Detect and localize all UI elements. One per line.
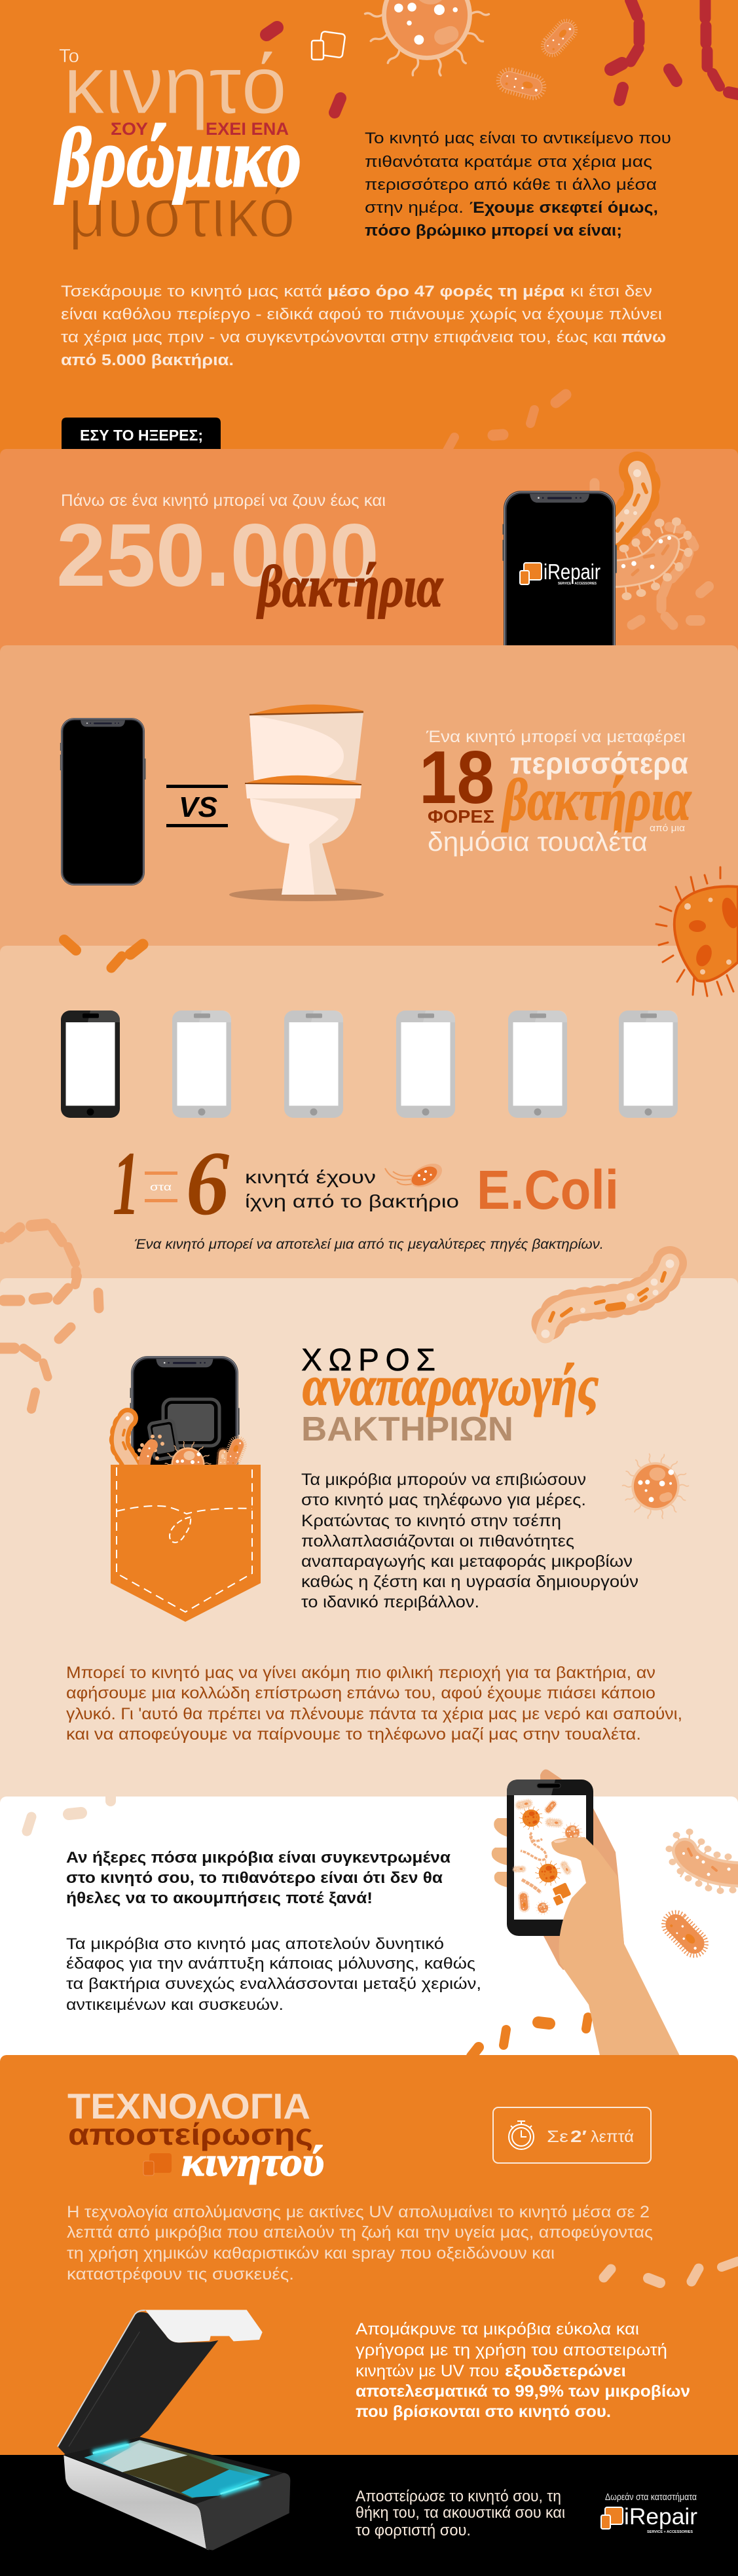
label: did you know: ΕΣΥ ΤΟ ΗΞΕΡΕΣ; <box>80 427 203 444</box>
text block: intro <box>365 130 671 240</box>
text block: removes microbes <box>356 2320 690 2421</box>
title: κινητό <box>64 40 287 131</box>
panel: breeding ground <box>0 1259 738 1808</box>
heading: ΤΕΧΝΟΛΟΓΙΑ <box>67 2086 310 2126</box>
text: 18 times more bacteria: βακτήρια <box>502 768 692 832</box>
stat label: bacteria: βακτήρια <box>257 554 443 619</box>
text block: 47 times a day: είναι καθόλου περίεργο - ειδικά αφού το πιάνουμε χωρίς να έχουμε πλύνει <box>61 306 662 323</box>
decorative capsules <box>0 1276 99 1409</box>
text: 18 times more bacteria: Ένα κινητό μπορεί να μεταφέρει <box>426 728 686 746</box>
text block: intro: Έχουμε σκεφτεί όμως, <box>470 199 658 217</box>
text block: 47 times a day: από 5.000 βακτήρια. <box>61 351 234 369</box>
text block: microbes: Κρατώντας το κινητό στην τσέπη <box>301 1512 561 1530</box>
text block: microbes: καθώς η ζέστη και η υγρασία δημιουργούν <box>301 1573 638 1591</box>
text block: intro: Το κινητό μας είναι το αντικείμενο που <box>365 130 671 147</box>
text: sterilize accessories: το φορτιστή σου. <box>356 2522 471 2539</box>
text: E.Coli: E.Coli <box>477 1159 619 1221</box>
text: sterilize accessories: θήκη του, τα ακουστικά σου και <box>356 2504 565 2522</box>
heading: κινητού <box>181 2140 324 2185</box>
logo: iRepair: iRepair <box>624 2504 697 2530</box>
stat: 250.000: 250.000 <box>56 505 379 605</box>
text: 18 times more bacteria: ΦΟΡΕΣ <box>428 806 494 827</box>
text block: removes microbes: κινητών με UV που <box>356 2362 499 2380</box>
illustration: phone in pocket <box>111 1356 261 1622</box>
note: Ένα κινητό μπορεί να αποτελεί μια από τις μεγαλύτερες πηγές βακτηρίων. <box>134 1237 604 1252</box>
panel: phone vs toilet <box>0 645 738 959</box>
text block: removes microbes: Απομάκρυνε τα μικρόβια εύκολα και <box>356 2320 639 2338</box>
heading <box>301 1343 599 1448</box>
icon: stopwatch <box>509 2121 534 2149</box>
germ: ball bacterium <box>665 1829 738 1894</box>
pocket <box>111 1465 261 1622</box>
text block: sticky coating: Μπορεί το κινητό μας να γίνει ακόμη πιο φιλική περιοχή για τα βακτήρια, αν <box>66 1664 655 1682</box>
panel: 250.000 bacteria <box>0 449 738 715</box>
germs in pocket <box>120 1416 248 1486</box>
illustration: hand holding phone <box>492 1770 681 2058</box>
text: 18 times more bacteria: δημόσια τουαλέτα <box>428 827 648 857</box>
vs badge <box>166 785 228 827</box>
text block: microbes: Τα μικρόβια μπορούν να επιβιώσουν <box>301 1471 586 1489</box>
icon: rod germ <box>658 1907 712 1961</box>
text block: UV technology: Η τεχνολογία απολύμανσης με ακτίνες UV απολυμαίνει το κινητό μέσα σε 2 <box>67 2203 650 2221</box>
phone <box>60 718 145 885</box>
text block: UV technology <box>67 2203 653 2283</box>
text block: 47 times a day: Τσεκάρουμε το κινητό μας κατά <box>61 283 322 300</box>
stat: 1 in 6: 1 <box>113 1133 139 1234</box>
text block: 47 times a day: μέσο όρο 47 φορές τη μέρα <box>327 283 564 300</box>
text block: intro: πιθανότατα κρατάμε στα χέρια μας <box>365 153 652 171</box>
title: μυστικό <box>68 173 295 252</box>
text: sterilize accessories <box>356 2488 565 2539</box>
decorative capsules <box>64 940 143 968</box>
text: phones have traces: ίχνη από το βακτήριο <box>245 1191 459 1211</box>
text: bold callout: Αν ήξερες πόσα μικρόβια είναι συγκεντρωμένα <box>66 1849 451 1867</box>
icon: e.coli germ <box>385 1159 446 1192</box>
text: bold callout: ήθελες να το ακουμπήσεις ποτέ ξανά! <box>66 1889 373 1907</box>
text block: intro: πόσο βρώμικο μπορεί να είναι; <box>365 222 622 240</box>
logo: iRepair <box>520 560 600 586</box>
stat: 1 in 6 <box>113 1133 229 1234</box>
text block: infection: Τα μικρόβια στο κινητό μας αποτελούν δυνητικό <box>66 1935 444 1953</box>
badge: in 2 minutes: λεπτά <box>591 2128 634 2146</box>
decorative capsules <box>604 2261 738 2283</box>
text block: removes microbes: γρήγορα με τη χρήση του αποστειρωτή <box>356 2341 667 2359</box>
title: ΕΧΕΙ ΕΝΑ <box>206 119 289 139</box>
text: free in stores: Δωρεάν στα καταστήματα <box>605 2492 697 2503</box>
text: phones have traces: κινητά έχουν <box>245 1167 376 1187</box>
text block: 47 times a day: κι έτσι δεν <box>570 283 652 300</box>
logo: iRepair <box>601 2504 697 2534</box>
text block: infection: τα βακτήρια συνεχώς εναλλάσσονται μεταξύ χεριών, <box>66 1975 481 1993</box>
title <box>54 40 301 252</box>
panel: UV sterilization <box>0 2055 738 2576</box>
germ: wiggly bacterium <box>541 1259 674 1338</box>
illustration: UV sterilizer <box>58 2310 290 2550</box>
text block: infection: έδαφος για την ανάπτυξη κάποιας μόλυνσης, καθώς <box>66 1955 475 1973</box>
badge: in 2 minutes: 2′ <box>570 2128 587 2146</box>
text block: intro: περισσότερο από κάθε τι άλλο μέσα <box>365 176 657 194</box>
text block: microbes: πολλαπλασιάζονται οι πιθανότητες <box>301 1532 574 1550</box>
icon: round germ <box>623 1454 688 1519</box>
text block: 47 times a day: πάνω <box>621 329 666 346</box>
heading: ΧΩΡΟΣ <box>301 1343 435 1378</box>
text block: UV technology: λεπτά από μικρόβια που απειλούν τη ζωή και την υγεία μας, αποφεύγοντας <box>67 2223 653 2242</box>
text block: infection <box>66 1935 481 2014</box>
text block: microbes: το ιδανικό περιβάλλον. <box>301 1593 479 1611</box>
footer band <box>0 2455 738 2576</box>
icon: large germ <box>365 0 489 76</box>
text: phones have traces <box>245 1167 459 1211</box>
text: intro line: Πάνω σε ένα κινητό μπορεί να ζουν έως και <box>61 492 386 510</box>
label: did you know <box>62 418 221 458</box>
heading <box>67 2086 324 2185</box>
text block: UV technology: καταστρέφουν τις συσκευές. <box>67 2265 294 2283</box>
title: βρώμικο <box>54 111 301 204</box>
panel: hero intro <box>0 0 738 458</box>
bacteria decoration: red chain <box>267 0 738 113</box>
logo: iRepair: SERVICE + ACCESSORIES <box>647 2530 693 2534</box>
text block: sticky coating: και να αποφεύγουμε να παίρνουμε το τηλέφωνο μαζί μας στην τουαλέτα. <box>66 1725 641 1744</box>
heading: αναπαραγωγής <box>303 1354 599 1417</box>
text block: intro: στην ημέρα. <box>365 199 464 217</box>
stat: 1 in 6: 6 <box>186 1133 229 1234</box>
heading: αποστείρωσης <box>68 2117 313 2151</box>
stat: 1 in 6: στα <box>150 1182 172 1193</box>
bacteria decoration <box>595 469 709 625</box>
germ crossing panels <box>656 867 738 996</box>
vs badge: VS <box>179 791 217 823</box>
panel: if you knew <box>0 1770 738 2065</box>
icon: toilet <box>229 704 384 901</box>
text block: UV technology: τη χρήση χημικών καθαριστικών και spray που οξειδώνουν και <box>67 2244 555 2263</box>
phone with logo <box>502 491 617 715</box>
decorative capsules <box>447 395 566 452</box>
text block: 47 times a day <box>61 283 666 369</box>
text: 18 times more bacteria <box>419 728 692 857</box>
germs on screen <box>513 1798 582 1915</box>
text: bold callout: στο κινητό σου, το πιθανότερο είναι ότι δεν θα <box>66 1869 443 1887</box>
icon row: six phones <box>61 1011 678 1118</box>
text block: sticky coating: αφήσουμε μια κολλώδη επίστρωση επάνω του, αφού έχουμε πιάσει κάποιο <box>66 1684 655 1702</box>
text block: infection: αντικειμένων και συσκευών. <box>66 1996 284 2014</box>
text block: removes microbes: αποτελεσματικά το 99,9% των μικροβίων <box>356 2382 690 2401</box>
badge: in 2 minutes: Σε <box>547 2128 568 2146</box>
text block: 47 times a day: τα χέρια μας πριν - να συγκεντρώνονται στην επιφάνεια του, έως και <box>61 329 617 346</box>
decorative capsules <box>471 2017 588 2056</box>
text block: microbes: αναπαραγωγής και μεταφοράς μικροβίων <box>301 1552 633 1571</box>
icon: rod germ <box>496 67 547 101</box>
text block: microbes: στο κινητό μας τηλέφωνο για μέρες. <box>301 1491 586 1509</box>
logo: iRepair: SERVICE + ACCESSORIES <box>558 582 597 586</box>
title: ΣΟΥ <box>111 119 148 139</box>
text block: removes microbes: που βρίσκονται στο κινητό σου. <box>356 2403 611 2421</box>
text: 18 times more bacteria: περισσότερα <box>510 746 688 780</box>
title: Το <box>59 46 79 67</box>
decorative capsules <box>27 1793 111 1831</box>
text: 18 times more bacteria: από μια <box>650 823 685 834</box>
badge: in 2 minutes <box>493 2107 651 2163</box>
text block: microbes <box>301 1471 638 1611</box>
text block: sticky coating <box>66 1664 682 1744</box>
text: 18 times more bacteria: 18 <box>419 736 494 819</box>
text block: removes microbes: εξουδετερώνει <box>505 2362 626 2380</box>
icon: rod germ <box>538 16 580 60</box>
text: sterilize accessories: Αποστείρωσε το κινητό σου, τη <box>356 2488 561 2505</box>
panel: 1 in 6 phones <box>0 867 738 1293</box>
icon: devices <box>312 31 345 60</box>
text: bold callout <box>66 1849 451 1907</box>
logo: iRepair: iRepair <box>544 560 600 584</box>
heading: ΒΑΚΤΗΡΙΩΝ <box>301 1410 513 1448</box>
text block: sticky coating: γλυκό. Γι 'αυτό θα πρέπει να πλένουμε πάντα τα χέρια μας με νερό και σαπούνι, <box>66 1705 682 1723</box>
